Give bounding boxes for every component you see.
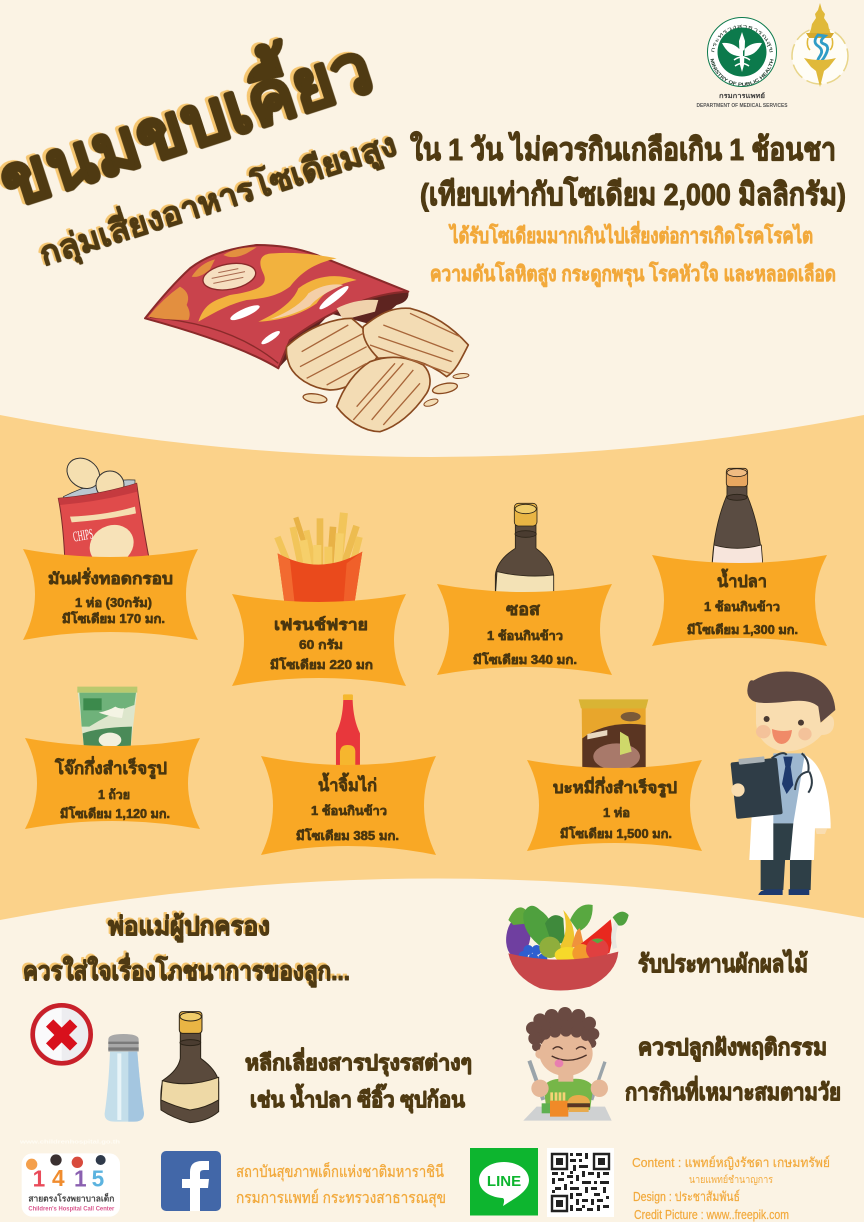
icon: prohibited mark [33,1005,91,1063]
text block: daily salt limit [410,131,846,212]
icon: sauce bottle [495,503,554,597]
ribbon: chili sauce: มีโซเดียม 385 มก. [296,828,399,843]
ribbon: instant porridge: โจ๊กกึ่งสำเร็จรูป [54,756,167,780]
ribbon: instant porridge: มีโซเดียม 1,120 มก. [60,806,170,821]
icon: happy eating boy [523,1007,612,1121]
ribbon: potato chips: 1 ห่อ (30กรัม) [75,596,152,610]
icon: small chips bag [58,452,150,573]
ribbon: french fries: มีโซเดียม 220 มก [270,657,373,672]
icon: small chips bag: CHIPS [72,526,94,546]
icon: fish sauce bottle [712,468,763,567]
ribbon: french fries: 60 กรัม [299,638,343,652]
logo: 1415 children's hospital call center: www.childrenhospital.go.th [19,1139,120,1145]
icon: line [470,1148,538,1216]
ribbon: sauce: ซอส [506,600,541,619]
icon: qr code [547,1148,614,1217]
text block: credits: นายแพทย์ชำนาญการ [689,1174,774,1186]
logo: ministry of public health: กรมการแพทย์ [719,92,765,100]
ribbon: potato chips [23,549,198,640]
icon: chili sauce bottle [336,694,360,767]
logo: 1415 children's hospital call center [19,1139,120,1217]
text: eat vegetables and fruit: รับประทานผักผลไม้ [638,949,808,978]
ribbon: instant porridge [25,738,200,829]
ribbon: sauce: 1 ช้อนกินข้าว [487,629,563,643]
text block: institute name: กรมการแพทย์ กระทรวงสาธารณสุข [236,1188,446,1208]
icon: facebook [161,1151,221,1211]
icon: salt shaker [105,1034,144,1122]
ribbon: potato chips: มีโซเดียม 170 มก. [62,611,165,626]
ribbon: instant noodles: บะหมี่กึ่งสำเร็จรูป [553,776,677,799]
logo: 1415 children's hospital call center: 1 [33,1166,45,1192]
icon: instant porridge cup [77,687,137,748]
ribbon: fish sauce: น้ำปลา [717,568,767,591]
text block: avoid seasonings [245,1047,472,1114]
text block: eating behaviour [625,1034,841,1105]
logo: 1415 children's hospital call center: 1 [74,1166,87,1192]
icon: french fries [274,512,363,607]
heading: parents advice: ควรใส่ใจเรื่องโภชนาการของลูก... [23,952,350,988]
logo: 1415 children's hospital call center: สายตรงโรงพยาบาลเด็ก [28,1192,114,1204]
text block: institute name: สถาบันสุขภาพเด็กแห่งชาติมหาราชินี [236,1161,444,1182]
text block: credits: Content : แพทย์หญิงรัชดา เกษมทรัพย์ [632,1155,830,1170]
logo: ministry of public health: DEPARTMENT OF MEDICAL SERVICES [696,103,788,109]
logo: 1415 children's hospital call center: Children's Hospital Call Center [28,1205,115,1212]
ribbon: chili sauce [261,756,436,855]
ribbon: instant noodles: มีโซเดียม 1,500 มก. [560,826,672,841]
icon: instant noodle packet [579,699,648,770]
ribbon: fish sauce: 1 ช้อนกินข้าว [704,600,780,614]
ribbon: fish sauce [652,555,827,646]
icon: soy sauce bottle [161,1012,219,1123]
logo: ministry of public health [696,17,788,109]
text block: credits: Credit Picture : www..freepik.com [634,1207,789,1222]
text block: health risks [430,220,836,288]
logo: 1415 children's hospital call center: 5 [92,1166,104,1192]
text block: avoid seasonings: หลีกเลี่ยงสารปรุงรสต่างๆ [245,1047,472,1077]
heading: parents advice: พ่อแม่ผู้ปกครอง [108,911,270,943]
ribbon: chili sauce: 1 ช้อนกินข้าว [311,804,387,818]
panel: orange food band [0,415,864,920]
ribbon: chili sauce: น้ำจิ้มไก่ [318,772,377,795]
ribbon: fish sauce: มีโซเดียม 1,300 มก. [687,622,798,637]
text block: credits [632,1155,830,1222]
subtitle: กลุ่มเสี่ยงอาหารโซเดียมสูง [33,121,402,276]
ribbon: french fries: เฟรนช์ฟราย [274,616,368,634]
heading: parents advice [23,911,350,988]
ribbon: instant noodles: 1 ห่อ [603,806,630,820]
ribbon: sauce [437,584,612,675]
text block: avoid seasonings: เช่น น้ำปลา ซีอิ๊ว ซุปก้อน [250,1083,465,1114]
logo: 1415 children's hospital call center: 4 [52,1165,65,1191]
text block: eating behaviour: ควรปลูกฝังพฤติกรรม [638,1034,827,1062]
ribbon: potato chips: มันฝรั่งทอดกรอบ [48,567,173,588]
icon: line: LINE [487,1173,521,1190]
icon: large open chips bag [145,245,469,432]
illustration: doctor [730,672,835,895]
logo: royal emblem [792,3,848,87]
ribbon: french fries [232,594,406,686]
icon: fruit and vegetable bowl [504,904,629,990]
ribbon: instant porridge: 1 ถ้วย [98,788,130,802]
text block: eating behaviour: การกินที่เหมาะสมตามวัย [625,1075,841,1105]
text block: institute name [236,1161,446,1208]
logo: ministry of public health: กระทรวงสาธารณสุข [711,24,773,52]
ribbon: sauce: มีโซเดียม 340 มก. [473,652,577,667]
text block: credits: Design : ประชาสัมพันธ์ [633,1189,740,1204]
ribbon: instant noodles [527,760,702,851]
logo: ministry of public health: MINISTRY OF PUBLIC HEALTH [710,58,774,86]
title: ขนมขบเคี้ยว [0,15,382,223]
